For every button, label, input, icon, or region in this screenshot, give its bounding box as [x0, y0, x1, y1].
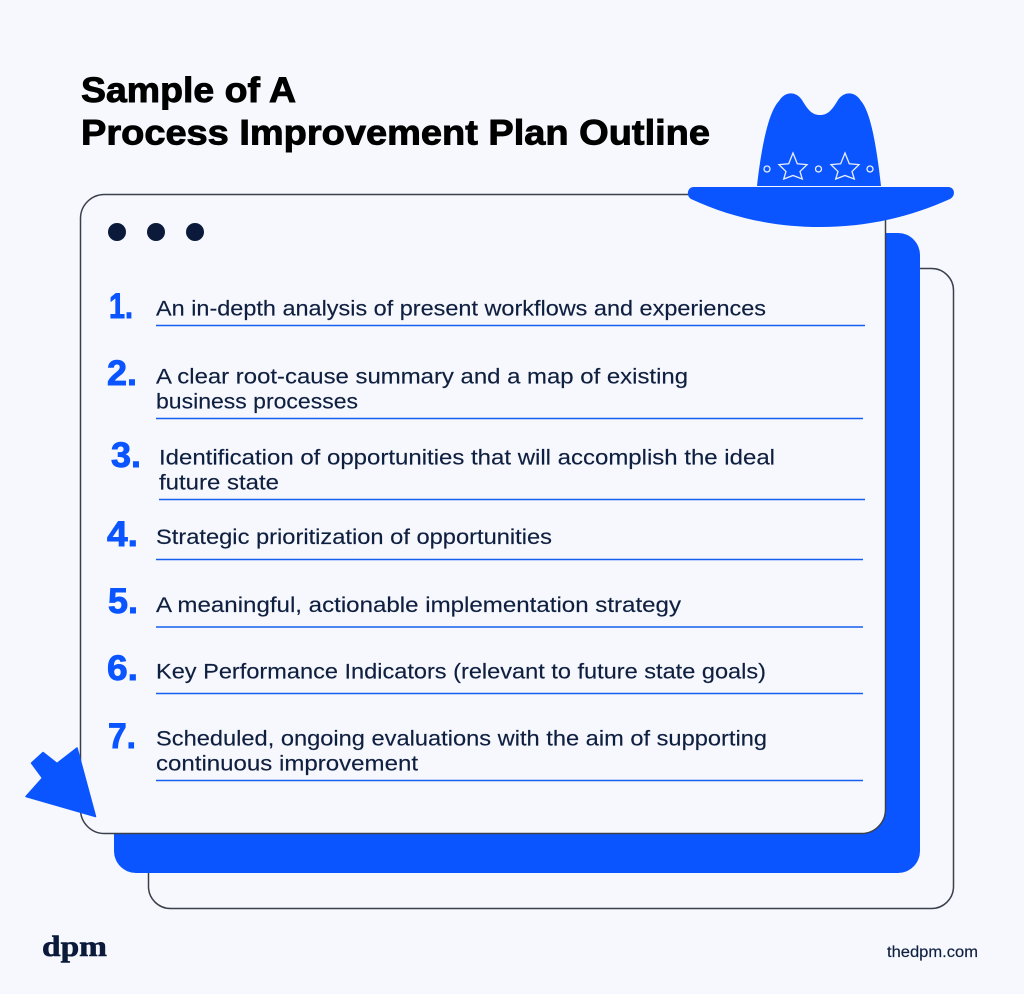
panel: main list card [80, 194, 886, 834]
title: Sample of A [81, 70, 296, 110]
list item 1 [109, 287, 865, 326]
list item 7: 7. [108, 717, 136, 756]
icon: cowboy hat [688, 93, 954, 227]
list item 4: 4. [107, 515, 138, 554]
list item 2: business processes [156, 390, 358, 414]
list item 6: 6. [107, 649, 138, 688]
list item 2: A clear root-cause summary and a map of existing [156, 364, 688, 388]
window dots [108, 223, 204, 241]
list item 2 [107, 354, 863, 418]
list item 5: 5. [108, 582, 138, 621]
title [81, 70, 710, 152]
list item 3: future state [159, 470, 279, 494]
list item 1: 1. [109, 287, 133, 326]
list item 6 [107, 649, 863, 694]
list item 4: Strategic prioritization of opportunities [156, 525, 552, 549]
list item 3: Identification of opportunities that will accomplish the ideal [159, 446, 775, 470]
list item 2: 2. [107, 354, 137, 393]
list item 7 [108, 717, 863, 780]
list item 1: An in-depth analysis of present workflows and experiences [156, 296, 766, 320]
list item 5 [108, 582, 863, 627]
logo: dpm: dpm [42, 930, 107, 963]
list item 7: continuous improvement [156, 752, 418, 776]
list item 3: 3. [111, 436, 141, 475]
title: Process Improvement Plan Outline [81, 112, 710, 152]
list item 6: Key Performance Indicators (relevant to future state goals) [156, 660, 766, 684]
list item 3 [111, 436, 865, 500]
list item 5: A meaningful, actionable implementation strategy [156, 593, 681, 617]
list item 7: Scheduled, ongoing evaluations with the aim of supporting [156, 726, 767, 750]
panel: blue offset card [114, 233, 920, 873]
panel: back outline card [148, 268, 954, 908]
list item 4 [107, 515, 863, 560]
footer url: thedpm.com [887, 944, 978, 961]
icon: arrow [26, 748, 96, 816]
